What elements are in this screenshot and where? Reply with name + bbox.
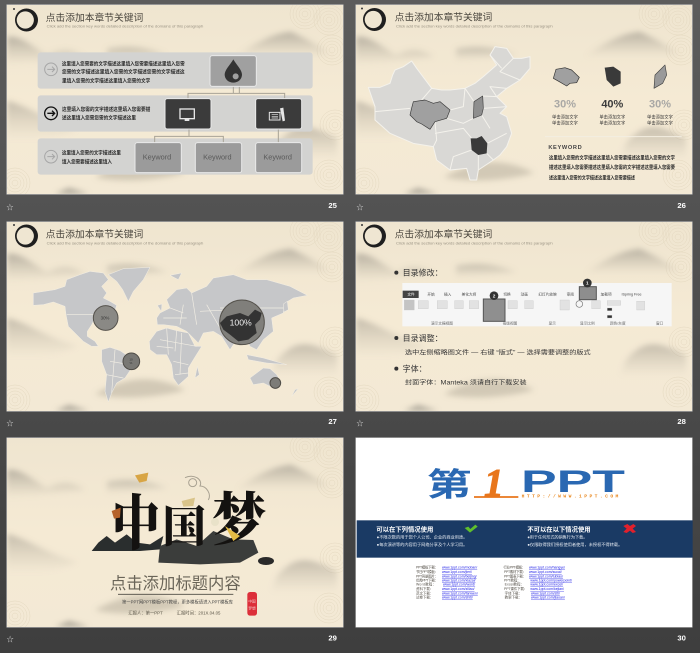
bullet heading: layout: 目录调整： [403, 333, 443, 343]
icon: water drop [225, 59, 242, 83]
ribbon screenshot: 2 [493, 293, 496, 298]
page number: 28 [677, 417, 687, 426]
layout instruction: 选中左侧缩略图文件 — 右键 “版式” — 选择需要调整的版式 [405, 349, 591, 357]
prohibited uses: ●仅限取得我们授权使用者使用，未授权不得转载。 [527, 541, 622, 547]
link list left: PPT模板下载： [416, 565, 438, 570]
world map [33, 267, 307, 402]
slide 25: keyword hierarchy [0, 0, 350, 211]
icon: document and pen [269, 108, 285, 121]
ribbon screenshot: 显示 [549, 322, 556, 326]
region: Hunan [471, 136, 487, 155]
link list right: www.1ppt.com/tubiao/ [529, 574, 563, 578]
ribbon screenshot: iSpring Free [622, 293, 642, 297]
slide 28 content [356, 228, 687, 427]
red seal: 中国 [248, 599, 256, 604]
percentage labels: 单击添加文字 [552, 113, 579, 120]
link list left: 优秀PPT下载： [416, 578, 438, 583]
allowed uses: ●不限次数的用于您个人公司、企业的商业用途。 [377, 534, 467, 540]
row text [62, 59, 185, 165]
icon: red cross [623, 524, 636, 533]
row text: 述这里填入您需您需的文字描述这里 [62, 113, 137, 121]
slide 29 content [7, 473, 337, 643]
heading: 点击添加本章节关键词 [46, 12, 143, 24]
link list right: www.1ppt.com/ziti/ [531, 591, 560, 595]
ribbon screenshot: 幻灯片放映 [538, 292, 557, 297]
underline [118, 593, 233, 596]
link list right: www.1ppt.com/sucai/ [529, 570, 562, 574]
logo: HTTP://WWW.1PPT.COM [522, 493, 619, 499]
ribbon screenshot: 1 [586, 281, 589, 286]
keyword labels: Keyword [263, 152, 292, 161]
footer star: ☆ [6, 418, 13, 427]
ribbon screenshot: 插入 [444, 292, 452, 297]
slide 26: China map [349, 0, 699, 211]
bubble: USA: 30% [101, 315, 109, 320]
slide 27: world map [0, 216, 350, 427]
bubble: Brazil: % [130, 361, 133, 365]
row text: 您需的文字描述这里填入您需的文字描述您需的文字描述这 [62, 68, 185, 76]
heading: 点击添加本章节关键词 [46, 228, 143, 240]
link list left: 节日PPT模板： [416, 569, 438, 574]
percentages [554, 99, 671, 111]
ribbon screenshot: 美化大师 [462, 292, 477, 297]
link list right: www.1ppt.com/hangye/ [529, 566, 565, 570]
link list left: www.1ppt.com/word/ [443, 583, 475, 587]
author and date [128, 610, 221, 617]
link list left: www.1ppt.com/ziliao/ [442, 587, 475, 591]
ribbon screenshot: 颜色/灰度 [610, 321, 626, 326]
main title: 点击添加标题内容 [110, 575, 241, 593]
bubble: China 100% [220, 300, 264, 345]
keyword labels [143, 152, 292, 161]
font instruction: 封面字体：Manteka 须请自行下载安装 [405, 379, 527, 387]
link list left: www.1ppt.com/shiti/ [442, 596, 473, 600]
percentages: 30% [649, 99, 671, 111]
link list right: 行业PPT模板： [503, 565, 525, 570]
percentage labels: 单击添加文字 [647, 113, 674, 120]
logo: 1 [484, 460, 504, 504]
ribbon screenshot: 母版视图 [503, 321, 518, 326]
ribbon screenshot: 显示比例 [580, 321, 595, 326]
calligraphy title: 梦 [212, 475, 267, 556]
ribbon screenshot: 演示文稿视图 [431, 321, 453, 326]
logo [427, 460, 625, 504]
slide 25 content [6, 12, 338, 211]
slide 27 content [6, 228, 337, 427]
percentage labels [552, 113, 674, 127]
small ink cloud [258, 557, 274, 565]
link list left: 试卷下载： [416, 595, 433, 600]
link list right: Excel教程： [505, 582, 524, 587]
mini map shapes [553, 65, 667, 88]
percentage labels: 单击添加文字 [647, 120, 674, 127]
ribbon screenshot: 动画 [521, 292, 528, 297]
heading: 点击添加本章节关键词 [395, 12, 492, 24]
keyword text [549, 153, 676, 181]
ribbon screenshot: 窗口 [656, 321, 664, 326]
bubble: USA [93, 306, 118, 330]
cloud scroll [185, 476, 209, 500]
bullet heading: font [394, 364, 427, 374]
footer star: ☆ [356, 418, 363, 427]
logo: 第 [427, 466, 472, 502]
link list left: www.1ppt.com/moban/ [442, 566, 477, 570]
red seal [247, 592, 257, 616]
slide 26 content [356, 12, 686, 211]
link list left: 范文下载： [416, 590, 433, 595]
link list left: www.1ppt.com/jieri/ [442, 570, 472, 574]
region: Qinghai [410, 100, 450, 129]
footer star: ☆ [356, 202, 363, 211]
divider [545, 135, 682, 138]
percentage labels: 单击添加文字 [552, 120, 579, 127]
row text: 这里填入您需要的文字描述这里填入您需要描述这里填入您需 [62, 59, 185, 67]
icon: monitor [180, 109, 194, 121]
subheading: Click add the section key words detailed description of the domains of this paragraph [396, 240, 553, 245]
slide 28: instructions [349, 216, 699, 427]
link list right: www.1ppt.com/excel/ [530, 583, 563, 587]
author and date: 汇报人：第一PPT [128, 610, 163, 617]
calligraphy title: 中 [112, 476, 160, 562]
slide 29: cover [0, 432, 350, 643]
link list right: PPT素材下载： [504, 569, 526, 574]
page number: 26 [677, 201, 686, 210]
link list right: PPT课件下载： [504, 586, 527, 591]
ribbon screenshot: 开始 [427, 292, 435, 297]
prohibited uses: 不可以在以下情况使用 [527, 525, 591, 534]
link list right: www.1ppt.com/kejian/ [530, 587, 564, 591]
ribbon screenshot: 切换 [503, 292, 511, 297]
calligraphy title: 国 [163, 493, 206, 555]
bubble: Australia [270, 378, 281, 388]
calligraphy title [112, 475, 267, 562]
gold accents [112, 473, 240, 541]
connectors [155, 86, 285, 143]
prohibited uses: ●用于任何形式的销售行为下载。 [527, 534, 587, 540]
heading: 点击添加本章节关键词 [395, 228, 492, 240]
ribbon screenshot [402, 279, 672, 326]
page number: 25 [328, 201, 338, 210]
bubble: Brazil: 10 [129, 357, 133, 361]
page number: 27 [328, 417, 337, 426]
percentages: 30% [554, 99, 576, 111]
link list right: www.1ppt.com/jiaoan/ [531, 596, 565, 600]
ribbon screenshot: 审阅 [567, 292, 574, 297]
allowed uses [376, 525, 467, 547]
subheading: Click add the section key words detailed description of the domains of this paragraph [47, 240, 203, 245]
keyword text: 这里填入您需的文字描述这里填入您需要描述这里填入您需的文字 [549, 153, 675, 161]
keyword labels: Keyword [143, 152, 171, 161]
subtitle: 第一PPT网PPT模板PPT教程，更多模板请进入PPT模板库 [122, 599, 234, 606]
link list left: www.1ppt.com/xiazai/ [442, 579, 476, 583]
tree boxes [135, 56, 302, 173]
China map [368, 47, 530, 180]
prohibited uses [527, 525, 622, 547]
link list left: www.1ppt.com/beijing/ [442, 574, 477, 578]
percentage labels: 单击添加文字 [599, 120, 626, 127]
ink mountains [92, 531, 258, 564]
link list left: Word教程： [416, 582, 436, 587]
ribbon screenshot: 加载项 [601, 292, 612, 297]
link list left: www.1ppt.com/fanwen/ [442, 591, 478, 595]
page number: 30 [677, 633, 686, 642]
keyword text: 述这里填入您需的文字描述这里填入您需要描述 [549, 173, 636, 181]
bubble: China 100%: 100% [230, 317, 252, 327]
allowed uses: ●每次演讲等的内容用于网络分享及个人学习用。 [377, 541, 467, 547]
logo: PPT [521, 464, 625, 499]
link list right: 字体下载： [505, 590, 522, 595]
keyword labels: Keyword [203, 152, 232, 161]
subheading: Click add the section key words detailed description of the domains of this paragraph [47, 24, 203, 29]
icon: green check [465, 525, 478, 533]
percentage labels: 单击添加文字 [599, 113, 626, 120]
row text: 这里填入您需的文字描述这里填入您需要描 [62, 105, 151, 113]
red seal: 梦想 [248, 605, 256, 610]
footer star: ☆ [7, 634, 14, 643]
row text: 填入您需要描述这里填入 [62, 157, 113, 165]
link list left: PPT背景图片： [416, 573, 438, 578]
row text: 这里填入您需的文字描述这里 [62, 149, 122, 157]
keyword heading: KEYWORD [548, 145, 582, 151]
bullet heading: contents edit: 目录修改： [403, 268, 443, 278]
slide 30 content [357, 460, 693, 642]
region: Shanxi [473, 96, 483, 118]
row text: 里填入您需的文字描述这里填入您需的文字 [62, 77, 150, 85]
ribbon screenshot: 文件 [407, 292, 415, 297]
link list right: 教案下载： [505, 595, 522, 600]
allowed uses: 可以在下列情况使用 [376, 525, 433, 534]
arrow icons [45, 63, 57, 163]
link list right [503, 565, 572, 600]
link list right: PPT教程： [504, 578, 521, 583]
link list right: PPT图表下载： [504, 573, 526, 578]
footer star: ☆ [6, 202, 13, 211]
percentages: 40% [601, 99, 624, 111]
page number: 29 [328, 633, 337, 642]
slide 30: brand page [356, 438, 693, 642]
subheading: Click add the section key words detailed description of the domains of this paragraph [396, 24, 553, 29]
keyword text: 描述这里填入您需要描述这里填入您需的文字描述这里填入您需要 [549, 163, 676, 171]
navy band [357, 520, 693, 558]
author and date: 汇报时间：201X.04.05 [177, 610, 221, 617]
bubble: Brazil [123, 353, 140, 370]
bullet heading: font: 字体： [403, 364, 427, 374]
link list left: 资料下载： [416, 586, 433, 591]
row panels [38, 52, 313, 175]
link list right: www.1ppt.com/powerpoint/ [530, 579, 572, 583]
link list left [416, 565, 478, 600]
